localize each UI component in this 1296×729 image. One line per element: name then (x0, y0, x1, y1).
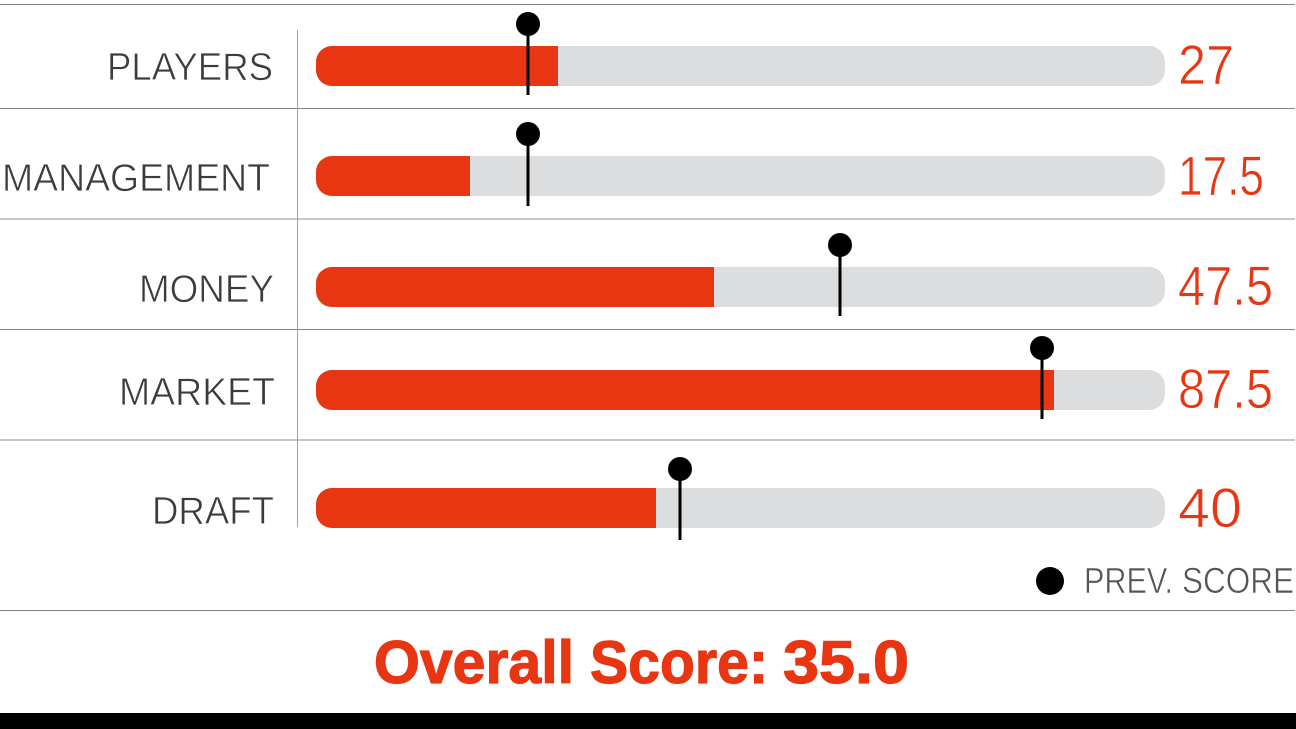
row: management (2, 122, 1264, 207)
row: management: 17.5 (1178, 144, 1264, 207)
overall score: Score: (590, 629, 768, 696)
legend: previous score (1036, 560, 1294, 601)
row: draft (152, 457, 1242, 540)
row: money (139, 233, 1273, 317)
overall score (374, 629, 909, 696)
row: players: 27 (1178, 33, 1234, 96)
row: players (107, 12, 1234, 96)
row: draft: 40 (1178, 476, 1242, 539)
row: market: MARKET (119, 371, 275, 414)
row: market: 87.5 (1178, 357, 1273, 420)
row: draft: DRAFT (152, 490, 274, 533)
row: management: MANAGEMENT (2, 157, 270, 200)
overall score: 35.0 (783, 629, 909, 696)
row: market (119, 336, 1273, 420)
bottom black band (0, 713, 1296, 729)
legend: previous score: PREV. (1084, 560, 1173, 601)
row: money: 47.5 (1178, 254, 1273, 317)
row: players: PLAYERS (107, 46, 273, 89)
overall score: Overall (374, 629, 574, 696)
row: money: MONEY (139, 268, 274, 311)
